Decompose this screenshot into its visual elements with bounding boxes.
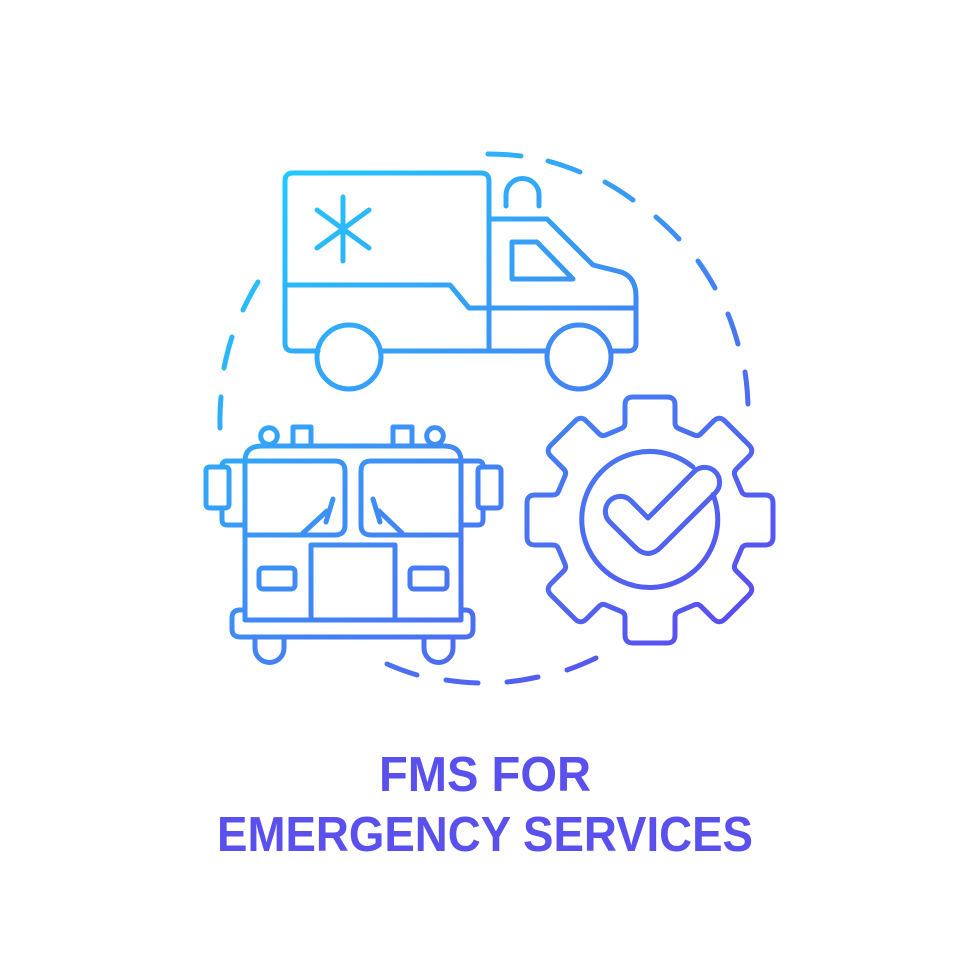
left wiper <box>303 499 333 533</box>
gear inner circle <box>582 451 718 587</box>
title line 2: EMERGENCY SERVICES <box>217 808 753 862</box>
right roof lights <box>393 427 443 446</box>
ambulance rear wheel <box>317 325 381 389</box>
ambulance body <box>285 173 636 351</box>
grille <box>311 545 395 620</box>
medical star <box>317 197 369 261</box>
right wiper <box>373 499 402 533</box>
title <box>217 748 753 862</box>
left mirror <box>206 461 245 525</box>
ambulance cab <box>489 219 636 351</box>
cab window <box>512 242 573 279</box>
truck body <box>245 446 461 620</box>
right tyre <box>424 637 453 662</box>
check mark <box>605 467 720 554</box>
dashed circle <box>220 154 748 683</box>
left tyre <box>255 637 284 662</box>
right mirror <box>461 461 501 525</box>
left roof lights <box>261 427 311 446</box>
ambulance front wheel <box>547 325 611 389</box>
left windshield <box>245 461 345 535</box>
left headlight <box>259 568 295 589</box>
right windshield <box>361 461 461 535</box>
icon: fire truck <box>206 427 501 662</box>
icon: gear with check mark <box>527 397 773 643</box>
title line 1: FMS FOR <box>379 748 591 802</box>
siren <box>506 178 539 206</box>
gear outline <box>527 397 773 643</box>
bumper <box>232 610 473 637</box>
icon: ambulance <box>285 173 636 389</box>
right headlight <box>410 568 447 589</box>
